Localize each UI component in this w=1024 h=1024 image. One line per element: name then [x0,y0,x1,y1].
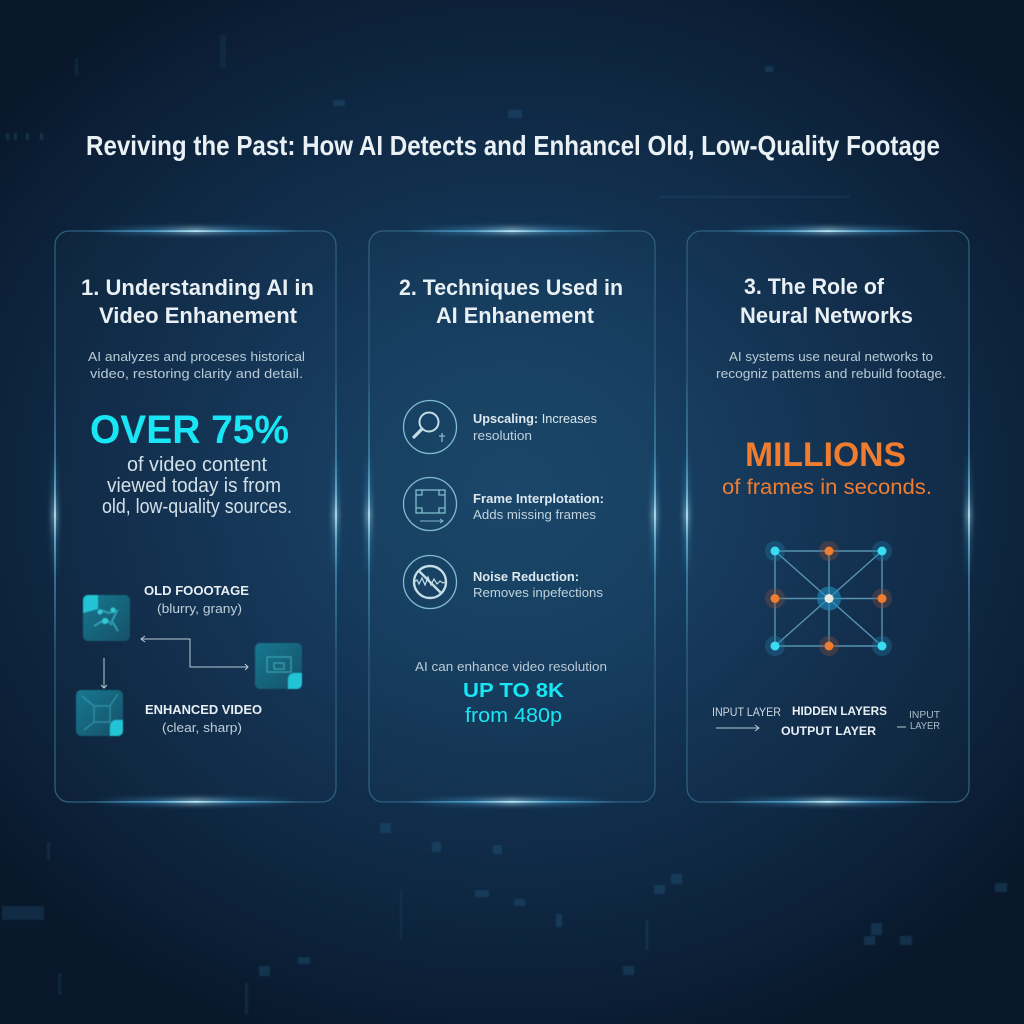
resolution note: AI can enhance video resolution [415,659,607,674]
technique: noise reduction [473,569,604,600]
technique: upscaling [473,411,597,443]
label: output layer: OUTPUT LAYER [781,724,876,738]
panel 1 heading: 1. Understanding AI in [81,275,314,300]
statistic caption: viewed today is from [107,475,281,497]
technique: frame interpolation [473,491,604,522]
panel 3 description: recogniz pattems and rebuild footage. [716,366,946,381]
panel: techniques [365,227,658,805]
statistic caption: of video content [127,454,267,476]
panel 3 heading: 3. The Role of [744,274,885,299]
panel 2 heading [399,275,623,328]
panel 1 heading: Video Enhanement [99,303,298,328]
label: enhanced video: (clear, sharp) [162,720,242,735]
statistic caption: old, low-quality sources. [102,496,292,518]
panel 1 description [88,349,305,381]
icon: processed frame tile [255,643,302,689]
panel: neural networks [683,227,972,805]
panel 3 heading [740,274,913,328]
panel 2 heading: 2. Techniques Used in [399,275,623,300]
panel 1 heading [81,275,314,328]
statistic: up to 8K [463,680,565,727]
statistic: up to 8K: from 480p [465,705,562,727]
panel 3 frame [683,227,972,805]
icon: magnifier [404,400,456,454]
statistic: millions: MILLIONS [745,436,906,474]
icon: noise reduction [404,556,456,608]
statistic: up to 8K: UP TO 8K [463,680,565,702]
technique: frame interpolation: Adds missing frames [473,507,597,522]
statistic caption [102,454,292,518]
label: old footage: (blurry, grany) [157,601,242,616]
label: old footage: OLD FOOOTAGE [144,583,249,598]
panel 3 heading: Neural Networks [740,303,913,328]
panel 1 description: AI analyzes and proceses historical [88,349,305,364]
technique: noise reduction: Noise Reduction: [473,569,579,584]
neural network diagram [765,541,892,656]
arrow: old to enhanced [101,658,107,688]
icon: old footage tile [83,595,130,641]
panel 2 heading: AI Enhanement [436,303,595,328]
technique: upscaling: resolution [473,428,532,443]
statistic caption: of frames in seconds. [722,476,932,499]
panel 3 description: AI systems use neural networks to [729,349,933,364]
icon: frame interpolation [404,478,456,530]
panel 1 description: video, restoring clarity and detail. [90,366,303,381]
label: enhanced video: ENHANCED VIDEO [145,702,262,717]
label: input layer: INPUT LAYER [712,707,781,719]
icon: enhanced video tile [76,690,123,736]
label: hidden layers: HIDDEN LAYERS [792,704,887,718]
label: second input layer [897,709,941,732]
technique: frame interpolation: Frame Interplotation: [473,491,604,506]
label: enhanced video [145,702,262,735]
label: second input layer: INPUT [909,709,941,721]
technique: upscaling: Upscaling: Increases [473,411,597,426]
label: second input layer: LAYER [910,720,940,732]
technique: noise reduction: Removes inpefections [473,585,604,600]
panel 3 description [716,349,946,381]
label: input layer [712,707,781,731]
label: old footage [144,583,249,616]
statistic: over 75%: OVER 75% [90,408,289,452]
panel: understanding AI in video enhancement [51,227,339,805]
arrow: frame connector [141,636,248,670]
panel 2 frame [365,227,658,805]
panel 1 frame [51,227,339,805]
